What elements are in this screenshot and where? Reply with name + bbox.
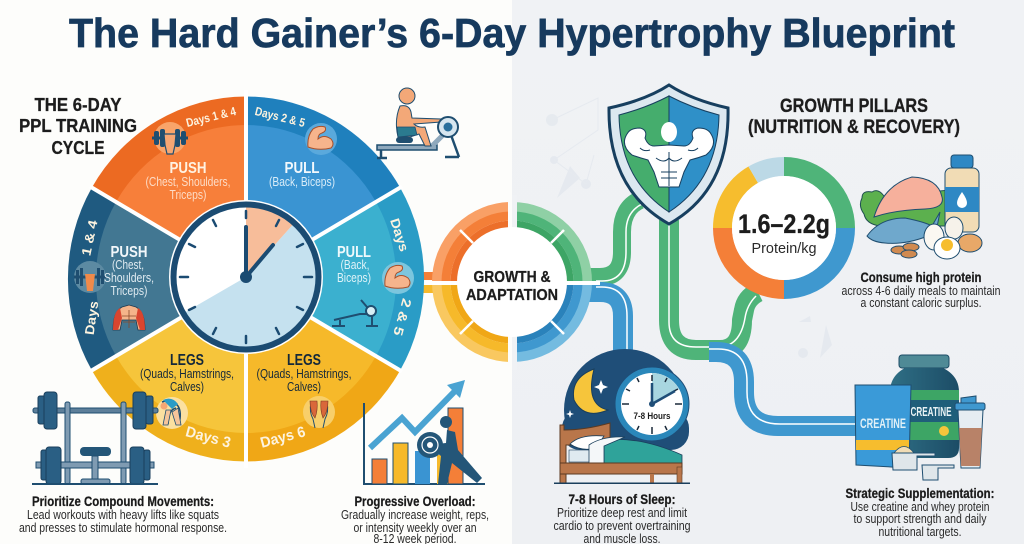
text block: sleep: cardio to prevent overtraining	[554, 519, 691, 533]
segment: pull days 2 & 5 top	[254, 104, 337, 189]
segment: legs left: Days 3	[184, 423, 233, 452]
text block: high protein: Consume high protein	[860, 270, 982, 285]
icon: progressive overload chart	[364, 380, 485, 484]
heading: the 6-day PPL training cycle: THE 6-DAY	[34, 94, 122, 115]
segment: pull days 2 & 5 top: PULL	[284, 160, 320, 177]
text block: compound movements: Lead workouts with heavy lifts like squats	[27, 508, 219, 522]
icon: dumbbell in hand	[152, 122, 188, 154]
segment: pull right: (Back,	[340, 258, 370, 272]
icon: chest and shoulders	[113, 305, 145, 330]
clock sector: peach	[246, 207, 293, 277]
heading: growth pillars: GROWTH PILLARS	[780, 96, 928, 117]
icon: lettuce	[860, 190, 950, 226]
clock sector: light blue	[186, 225, 316, 347]
segment: legs right: Days 6	[258, 423, 307, 452]
icon: person pushing plate	[417, 416, 482, 484]
icon: bottle	[945, 155, 979, 232]
segment: pull right: Days	[387, 216, 412, 253]
heading: the 6-day PPL training cycle	[19, 94, 137, 158]
segment: push left: PUSH	[110, 244, 148, 261]
segment: legs right: (Quads, Hamstrings,	[256, 367, 352, 381]
title: The Hard Gainer’s 6-Day Hypertrophy Blueprint	[69, 10, 955, 56]
icon: eggs and nuts	[891, 217, 982, 259]
icon: small rowing machine	[332, 300, 378, 326]
text block: progressive overload: Gradually increase weight, reps,	[341, 508, 489, 522]
segment: push left: (Chest,	[112, 258, 144, 272]
segment: push left: 1 & 4	[78, 218, 101, 257]
text block: progressive overload	[341, 494, 489, 544]
text block: supplementation: nutritional targets.	[878, 525, 962, 539]
hub ring: growth and adaptation	[425, 195, 600, 370]
icon: bent over squat figure	[156, 397, 188, 429]
icon: bed	[554, 423, 690, 484]
segment: push days 1 & 4 top	[146, 104, 238, 202]
icon: protein foods	[860, 155, 982, 259]
segment: push left: Days	[82, 300, 101, 336]
figure	[624, 122, 714, 187]
segment: push days 1 & 4 top: PUSH	[170, 160, 206, 177]
heading: growth pillars	[748, 96, 960, 138]
icon: scoops with powder	[892, 446, 954, 480]
icon: chicken breast	[874, 177, 942, 217]
segment: legs left: (Quads, Hamstrings,	[140, 367, 234, 381]
segment: pull right	[332, 216, 415, 337]
icon: sleep, moon, clock and bed	[554, 349, 690, 484]
icon: leg muscles	[303, 396, 335, 428]
segment: push days 1 & 4 top: Triceps)	[170, 188, 206, 202]
text block: sleep	[554, 492, 691, 544]
segment: legs left: LEGS	[170, 352, 204, 369]
hub label: GROWTH &	[474, 269, 551, 286]
text block: compound movements: Prioritize Compound Movements:	[32, 494, 214, 509]
icon: flexed biceps	[305, 123, 337, 155]
text block: supplementation: Strategic Supplementation:	[846, 486, 994, 501]
segment: push days 1 & 4 top: Days 1 & 4	[185, 104, 238, 130]
segment: pull days 2 & 5 top: (Back, Biceps)	[269, 175, 335, 189]
icon: shaker	[955, 396, 985, 468]
segment: legs right	[256, 352, 352, 452]
text block: compound movements	[19, 494, 227, 535]
icon: shield with muscular figure	[609, 85, 728, 224]
segment: legs left	[140, 352, 234, 452]
heading: the 6-day PPL training cycle: PPL TRAINING	[19, 115, 137, 136]
connector: green pipes from hub to shield and protein ring	[578, 200, 758, 350]
icon: barbell and bench	[32, 392, 158, 485]
icon: creatine supplements	[855, 355, 985, 480]
connector: blue pipes to sleep and supplements	[578, 287, 856, 426]
icon: rowing machine athlete	[377, 88, 459, 158]
wheel segments inner	[96, 125, 396, 433]
text block: sleep: Prioritize deep rest and limit	[557, 506, 687, 520]
text block: high protein: a constant caloric surplus.	[860, 296, 982, 310]
panel: PPL training wheel	[68, 90, 424, 468]
segment: push left: Triceps)	[110, 284, 148, 298]
chart: protein donut: 1.6–2.2g	[738, 209, 830, 239]
text block: supplementation: to support strength and daily	[854, 512, 987, 526]
segment: push left: Shoulders,	[104, 271, 154, 285]
segment: pull right: 2 & 5	[390, 297, 415, 337]
hub label	[466, 269, 558, 304]
text block: sleep: 7-8 Hours of Sleep:	[568, 492, 676, 507]
segment: push left	[74, 218, 154, 336]
segment: legs left: Calves)	[170, 380, 204, 394]
icon: creatine bag: CREATINE	[860, 415, 906, 431]
segment: push days 1 & 4 top: (Chest, Shoulders,	[146, 175, 230, 189]
text block: progressive overload: Progressive Overload:	[354, 494, 476, 509]
heading: the 6-day PPL training cycle: CYCLE	[52, 137, 104, 158]
icon: flexed biceps small	[382, 262, 414, 294]
hub label: ADAPTATION	[466, 287, 558, 304]
text block: supplementation	[846, 486, 994, 539]
segment: pull days 2 & 5 top: Days 2 & 5	[254, 104, 307, 130]
segment: pull right: PULL	[337, 244, 371, 261]
icon: dumbbell in hand dark	[74, 261, 106, 293]
chart: protein donut	[722, 166, 846, 290]
segment: pull right: Biceps)	[337, 271, 371, 285]
text block: compound movements: and presses to stimulate hormonal response.	[19, 521, 227, 535]
heading: growth pillars: (NUTRITION & RECOVERY)	[748, 117, 960, 138]
segment: legs right: Calves)	[287, 380, 321, 394]
segment: legs right: LEGS	[287, 352, 321, 369]
arrow: rising trend	[370, 380, 465, 448]
connector: orange and yellow stubs to wheel	[420, 272, 444, 293]
chart: protein donut: Protein/kg	[752, 240, 816, 257]
icon: clock 7-8 hours: 7-8 Hours	[634, 411, 670, 421]
text block: progressive overload: or intensity weekly over an	[354, 521, 477, 535]
text block: supplementation: Use creatine and whey protein	[850, 500, 990, 514]
icon: creatine jar: CREATINE	[910, 405, 952, 419]
clock	[169, 200, 323, 354]
text block: high protein	[842, 270, 1001, 310]
icon: moon	[573, 369, 608, 413]
icon: fish	[867, 212, 942, 243]
wheel segments outer	[68, 96, 424, 462]
